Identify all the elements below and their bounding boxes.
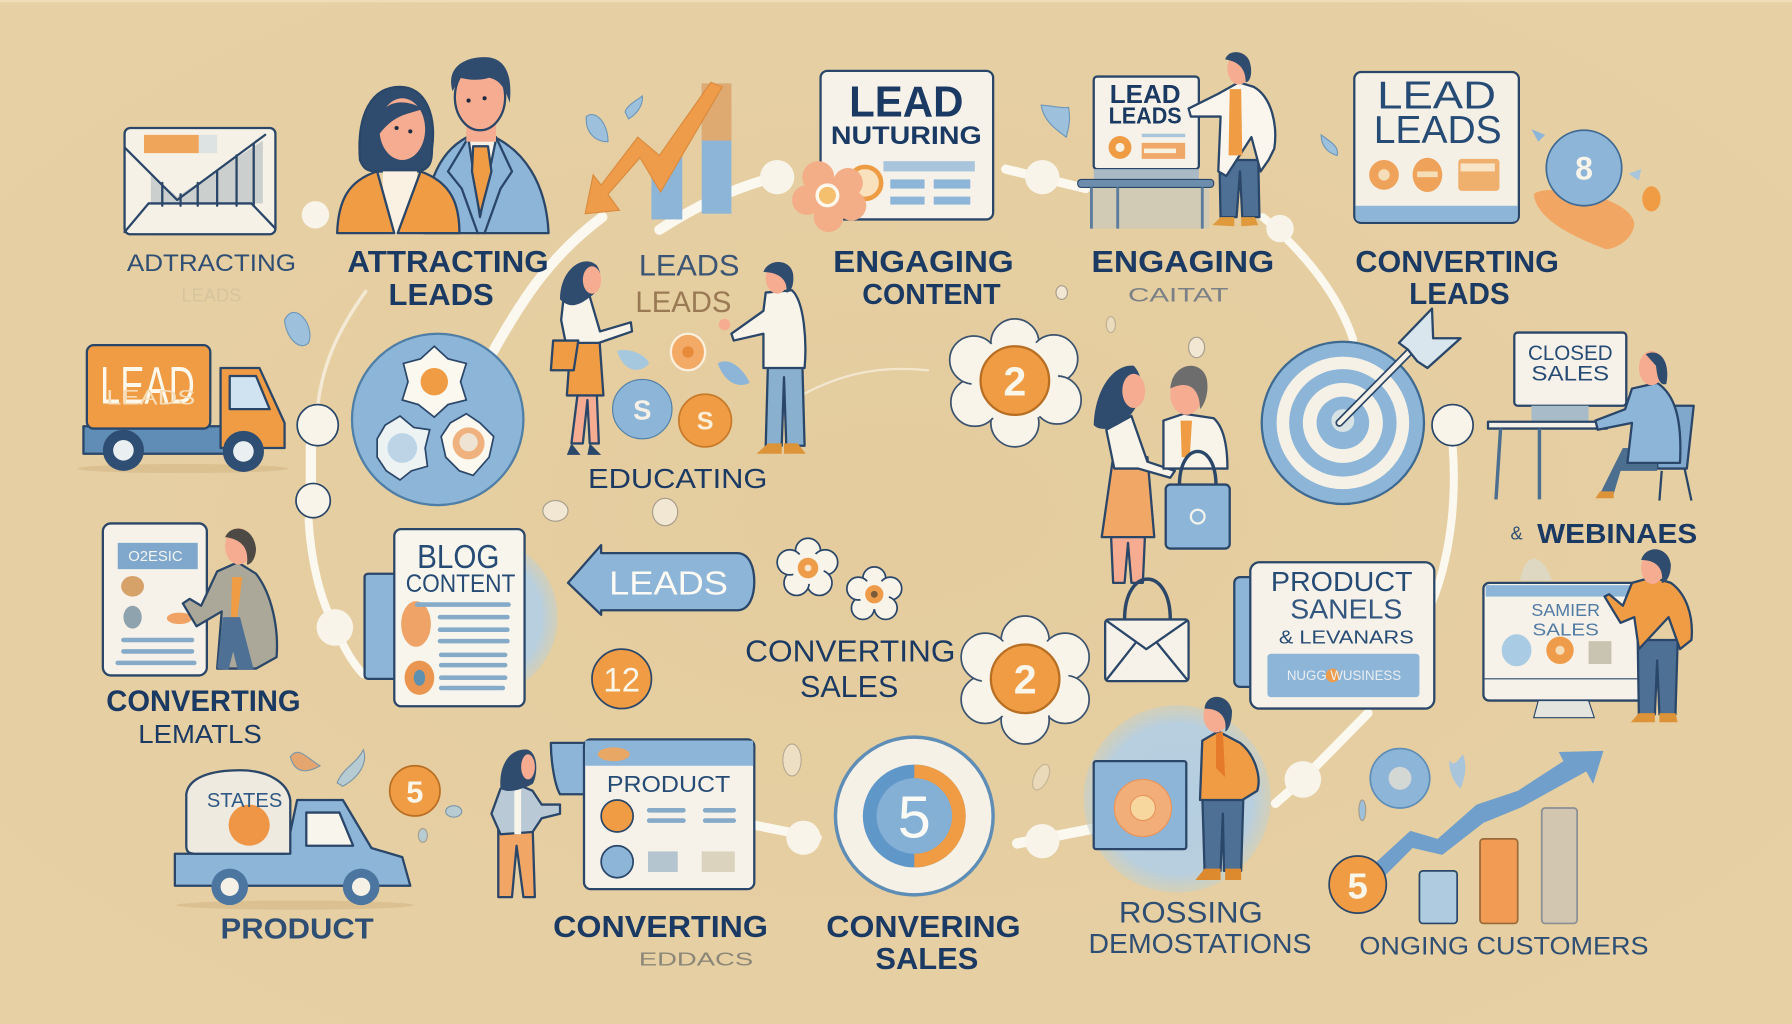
chart: growth bars with arrow bbox=[1329, 751, 1603, 923]
card: blog content: CONTENT bbox=[406, 570, 515, 598]
connecting journey path bbox=[309, 169, 1454, 843]
card: lead leads bbox=[1354, 72, 1519, 223]
icon: closed sales desk: SALES bbox=[1531, 361, 1609, 386]
woman bbox=[337, 87, 459, 234]
badge: 12: 12 bbox=[603, 661, 640, 699]
person seated bbox=[1595, 351, 1694, 501]
badge: big 5 ring bbox=[835, 737, 993, 895]
card: product sanels: SANELS bbox=[1290, 593, 1402, 624]
icon: webinar monitor with presenter: SAMIER bbox=[1531, 600, 1600, 620]
card: left document with presenter bbox=[103, 523, 277, 675]
card: lead leads: LEADS bbox=[1374, 109, 1502, 152]
icon: leaves top bbox=[285, 96, 1337, 346]
label: engaging content: ENGAGING bbox=[833, 244, 1014, 279]
label: rossing demostations: DEMOSTATIONS bbox=[1089, 928, 1311, 959]
card: lead nurturing bbox=[821, 71, 993, 219]
label: product: PRODUCT bbox=[221, 913, 374, 945]
flower number 2 upper bbox=[950, 319, 1081, 447]
card: product sanels: NUGG WUSINESS bbox=[1287, 668, 1401, 683]
icon: coins and leaves: S bbox=[633, 394, 651, 425]
label: leads leads: LEADS bbox=[639, 249, 739, 282]
presenter bbox=[1605, 549, 1692, 722]
wheels bbox=[103, 430, 264, 472]
label: convering sales: CONVERING bbox=[826, 909, 1021, 944]
label: convering sales bbox=[826, 909, 1021, 976]
man bbox=[1163, 366, 1227, 469]
card: lead nurturing: LEAD bbox=[849, 79, 963, 127]
flower number 2 lower: 2 bbox=[1014, 657, 1037, 703]
label: converting eddacs: EDDACS bbox=[639, 949, 753, 970]
icon: orange truck: LEAD bbox=[100, 356, 195, 415]
path nodes bbox=[296, 160, 1473, 858]
icon: blue ball with orange splash bbox=[1531, 129, 1661, 249]
wheels bbox=[211, 869, 379, 905]
flower bbox=[1114, 779, 1171, 837]
man bbox=[424, 57, 549, 233]
man in coat bbox=[719, 262, 806, 454]
figures: woman and man bbox=[337, 57, 549, 234]
bars bbox=[1419, 808, 1577, 923]
label: converting sales bbox=[745, 634, 955, 704]
flower right bbox=[441, 414, 494, 475]
icon: presentation board and table: LEADS bbox=[1109, 102, 1182, 128]
arrow: leads: LEADS bbox=[609, 565, 728, 602]
figure: woman at product card bbox=[491, 743, 594, 897]
small decorative droplets bbox=[418, 286, 1366, 842]
label: adtracting: LEADS bbox=[181, 285, 241, 306]
icon: target with arrow bbox=[1262, 309, 1461, 504]
card: product sanels: PRODUCT bbox=[1271, 566, 1413, 597]
card: left document with presenter: O2ESIC bbox=[128, 549, 183, 565]
label: attracting leads bbox=[347, 244, 549, 312]
bag bbox=[1166, 451, 1230, 549]
label: webinaes: WEBINAES bbox=[1537, 518, 1697, 549]
icon: closed sales desk bbox=[1488, 333, 1694, 501]
icon: closed sales desk: CLOSED bbox=[1528, 340, 1613, 365]
presenter bbox=[183, 528, 277, 670]
arrow: leads bbox=[568, 545, 754, 615]
card: product sanels: & LEVANARS bbox=[1279, 626, 1414, 647]
icon: coins and leaves: S bbox=[697, 408, 714, 436]
label: educating: EDUCATING bbox=[588, 463, 767, 494]
arrow bbox=[1369, 751, 1603, 882]
badge: 12 bbox=[592, 649, 651, 709]
flower number 2 upper: 2 bbox=[1003, 358, 1026, 404]
label: rossing demostations bbox=[1089, 896, 1311, 959]
icon: presentation board and table: LEAD bbox=[1110, 79, 1181, 109]
badge: 5 bbox=[390, 766, 440, 816]
icon: floating shapes near truck bbox=[290, 750, 462, 817]
card: lead nurturing: NUTURING bbox=[831, 122, 982, 150]
label: converting leads: CONVERTING bbox=[1355, 244, 1559, 279]
label: converting leads bbox=[1355, 244, 1559, 311]
label: converting sales: SALES bbox=[800, 669, 898, 704]
label: engaging content bbox=[833, 244, 1014, 311]
card: product sanels bbox=[1234, 562, 1434, 709]
coin bbox=[1329, 856, 1386, 913]
icon: envelope with bars bbox=[125, 128, 275, 234]
icon: blue delivery truck bbox=[175, 770, 414, 910]
icon: coins and leaves bbox=[613, 334, 750, 447]
label: webinaes: & bbox=[1510, 522, 1523, 543]
card: lead leads: LEAD bbox=[1377, 75, 1496, 118]
arrow bbox=[1339, 309, 1461, 423]
icon: orange truck bbox=[78, 345, 288, 473]
icon: blue circle with flowers bbox=[352, 334, 523, 505]
icon: blue delivery truck: STATES bbox=[207, 789, 282, 812]
figures: woman and man with bag bbox=[1094, 366, 1230, 583]
icon: webinar monitor with presenter: SALES bbox=[1533, 619, 1599, 639]
card: blog content bbox=[365, 529, 558, 706]
person bbox=[1195, 697, 1259, 880]
badge: big 5 ring: 5 bbox=[898, 784, 931, 851]
label: engaging caitat: CAITAT bbox=[1128, 285, 1229, 307]
label: converting lematls: CONVERTING bbox=[106, 685, 301, 718]
icon: orange truck: LEADS bbox=[106, 385, 195, 410]
icon: small flowers bbox=[777, 538, 902, 619]
label: converting eddacs: CONVERTING bbox=[553, 909, 768, 944]
card: product: PRODUCT bbox=[607, 771, 730, 797]
label: rossing demostations: ROSSING bbox=[1119, 896, 1263, 929]
figures: two people talking bbox=[551, 261, 806, 455]
icon: blue ring and swirl bbox=[1370, 749, 1465, 808]
card: blog content: BLOG bbox=[417, 539, 499, 576]
label: engaging caitat: ENGAGING bbox=[1091, 244, 1274, 279]
flower top bbox=[402, 346, 466, 417]
icon: presentation board and table bbox=[1078, 77, 1214, 229]
card: product bbox=[584, 739, 754, 889]
badge: 5: 5 bbox=[406, 774, 423, 809]
label: converting eddacs bbox=[553, 909, 768, 970]
woman bbox=[1094, 366, 1175, 583]
label: converting lematls: LEMATLS bbox=[138, 719, 262, 749]
small flower two bbox=[847, 567, 902, 619]
icon: peach flower bbox=[792, 161, 866, 232]
label: attracting leads: ATTRACTING bbox=[347, 244, 549, 279]
label: engaging caitat bbox=[1091, 244, 1274, 307]
icon: envelope with handle bbox=[1105, 579, 1189, 681]
figure: presenter in white coat bbox=[1189, 52, 1275, 226]
icon: blue ball with orange splash: 8 bbox=[1575, 150, 1593, 186]
woman with bag bbox=[551, 261, 632, 455]
flower number 2 lower bbox=[961, 616, 1089, 744]
label: attracting leads: LEADS bbox=[389, 277, 494, 312]
label: ongoing customers: ONGING CUSTOMERS bbox=[1359, 932, 1649, 960]
flower left bbox=[377, 416, 430, 480]
panel: demonstration figure bbox=[1083, 697, 1271, 893]
icon: webinar monitor with presenter bbox=[1483, 549, 1692, 722]
label: engaging content: CONTENT bbox=[862, 279, 1001, 311]
coin: 5 bbox=[1348, 865, 1368, 906]
label: leads leads bbox=[635, 249, 739, 319]
label: convering sales: SALES bbox=[875, 941, 978, 976]
label: converting leads: LEADS bbox=[1409, 276, 1510, 311]
label: converting sales: CONVERTING bbox=[745, 634, 955, 669]
small flower one bbox=[777, 538, 838, 595]
label: adtracting bbox=[127, 250, 296, 306]
label: adtracting: ADTRACTING bbox=[127, 250, 296, 277]
label: converting lematls bbox=[106, 685, 301, 749]
chart: zigzag arrow and bars bbox=[585, 82, 731, 219]
label: leads leads: LEADS bbox=[635, 286, 731, 319]
